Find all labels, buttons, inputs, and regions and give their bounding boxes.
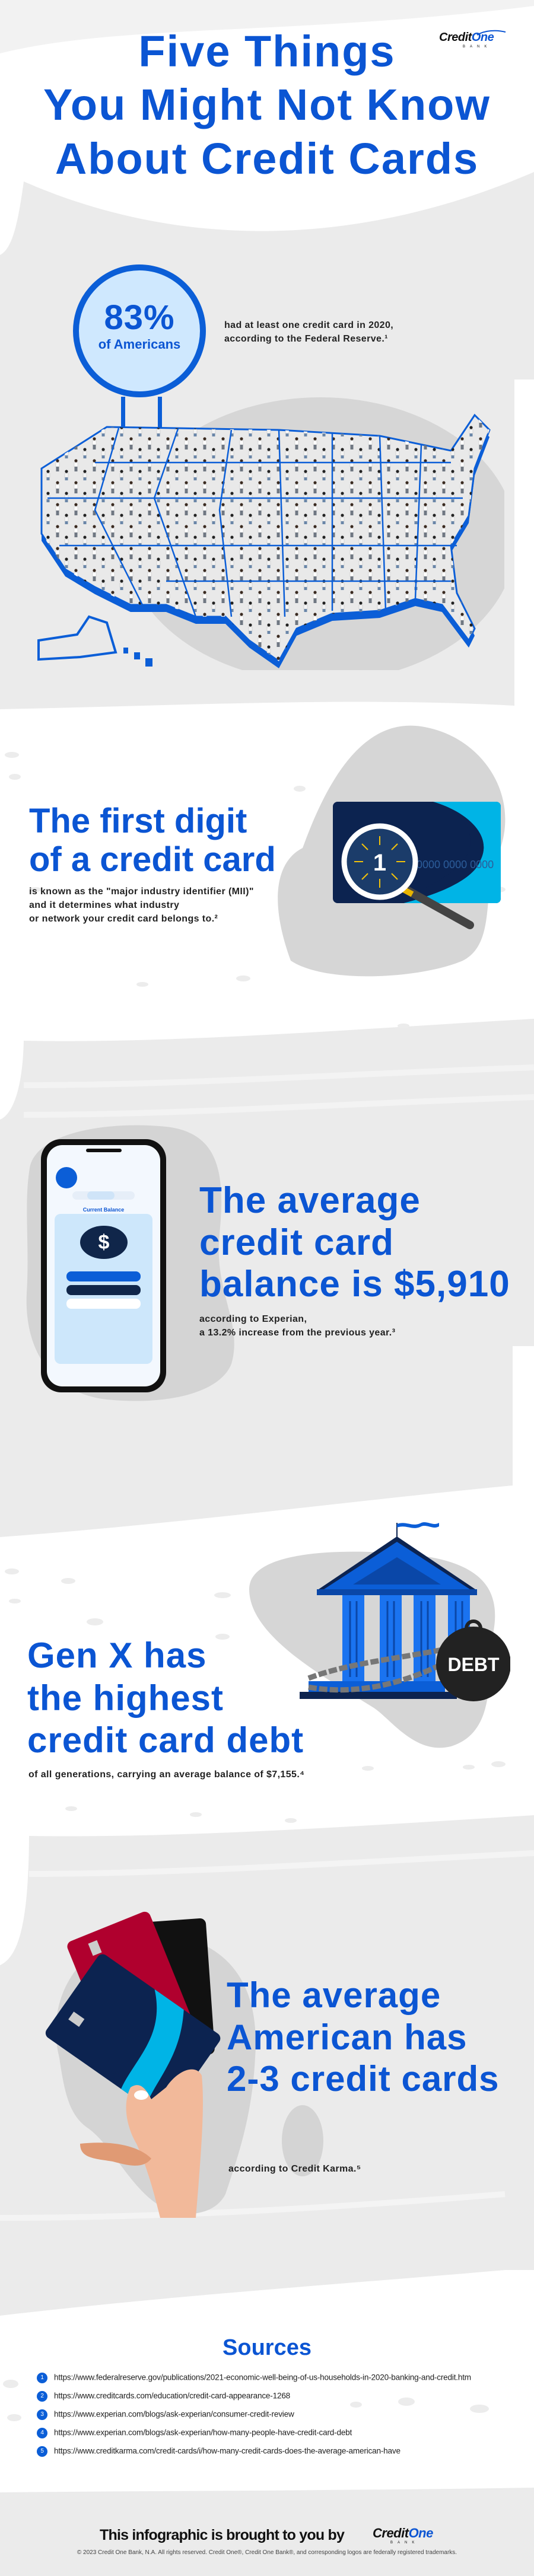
list: source urls: 3 (40, 2411, 44, 2418)
list: source urls: 5 (40, 2448, 44, 2454)
list: source urls: https://www.experian.com/blogs/ask-experian/consumer-credit-review (54, 2410, 294, 2419)
text: 83% description (224, 320, 393, 344)
icon: bank chained to debt ball (249, 1522, 510, 1748)
icon: smartphone: $ (98, 1231, 109, 1254)
icon: credit card with magnifier (278, 726, 506, 976)
panel: first digit: of a credit card (29, 840, 276, 879)
list: source urls: https://www.federalreserve.gov/publications/2021-economic-well-being-of-us-households-in-2020-banking-and-credit.htm (54, 2373, 471, 2382)
text: Experian balance source (199, 1314, 395, 1338)
panel: average balance: credit card (199, 1222, 394, 1263)
logo: footer Credit One: BANK (390, 2541, 419, 2545)
panel: average balance (26, 1126, 510, 1401)
footer: © 2023 Credit One Bank, N.A. All rights reserved. Credit One®, Credit One Bank®, and corresponding logos are federally registered trademarks. (77, 2549, 457, 2556)
callout posts (121, 397, 125, 428)
heading: average American cards: The average (227, 1975, 441, 2015)
heading: sources: Sources (223, 2335, 312, 2360)
heading: first digit: The first digit (29, 802, 247, 840)
logo: Credit One Bank: BANK (463, 45, 491, 49)
text: Experian balance source: a 13.2% increase from the previous year.³ (199, 1328, 395, 1338)
title: Five Things (138, 27, 396, 76)
callout circle: 83%: of Americans (98, 337, 180, 352)
text: 83% description: had at least one credit card in 2020, (224, 320, 393, 330)
panel: Gen X debt (27, 1522, 510, 1780)
shadow blob: right (282, 2105, 323, 2176)
callout circle: 83% (73, 264, 206, 397)
map of USA with people (37, 414, 491, 668)
panel: 83% of Americans (37, 264, 504, 670)
list: source urls: 2 (40, 2393, 44, 2399)
list: source urls: 4 (40, 2430, 44, 2436)
heading: Gen X: Gen X has (27, 1635, 206, 1675)
icon: smartphone: Current Balance (83, 1207, 124, 1213)
footer: This infographic is brought to you by (100, 2527, 344, 2543)
panel: average balance: balance is $5,910 (199, 1264, 510, 1305)
map shadow (152, 397, 504, 670)
text: Credit Karma: according to Credit Karma.⁵ (228, 2164, 361, 2174)
text: MII description: or network your credit card belongs to.² (29, 914, 218, 924)
logo: Credit One Bank (439, 30, 506, 49)
heading: average balance: The average (199, 1180, 421, 1221)
logo: footer Credit One: CreditOne (373, 2526, 433, 2540)
list: source urls: https://www.creditkarma.com/credit-cards/i/how-many-credit-cards-does-the-average-american-have (54, 2447, 401, 2456)
icon: smartphone (41, 1139, 166, 1392)
phone shadow blob (26, 1126, 234, 1401)
panel: sources (37, 2335, 471, 2457)
list: source urls: https://www.experian.com/blogs/ask-experian/how-many-people-have-credit-card-debt (54, 2428, 352, 2437)
footer (77, 2526, 457, 2556)
text: Experian balance source: according to Experian, (199, 1314, 307, 1324)
panel: number of cards (45, 1912, 500, 2218)
title (43, 27, 491, 183)
panel: first digit (29, 726, 506, 976)
text: MII description: is known as the "major industry identifier (MII)" (29, 887, 254, 897)
callout circle: 83%: 83% (104, 298, 175, 337)
title: About Credit Cards (55, 134, 479, 183)
icon: credit card with magnifier: 0000 0000 0000 (417, 859, 494, 871)
panel: number of cards: American has (227, 2017, 468, 2057)
icon: hand holding credit cards (45, 1912, 256, 2218)
panel: Gen X debt: the highest (27, 1678, 224, 1718)
icon: bank chained to debt ball: DEBT (447, 1654, 500, 1675)
list: source urls: https://www.creditcards.com/education/credit-card-appearance-1268 (54, 2392, 290, 2400)
text: Gen X balance: of all generations, carrying an average balance of $7,155.⁴ (28, 1770, 304, 1780)
title: You Might Not Know (43, 80, 491, 129)
text: MII description (29, 887, 254, 924)
list: source urls (37, 2373, 471, 2457)
logo: Credit One Bank: CreditOne (439, 31, 494, 44)
icon: credit card with magnifier: 1 (373, 850, 386, 876)
list: source urls: 1 (40, 2374, 44, 2381)
panel: number of cards: 2-3 credit cards (227, 2059, 500, 2099)
text: 83% description: according to the Federal Reserve.¹ (224, 334, 388, 344)
alaska and hawaii (39, 617, 116, 659)
panel: Gen X debt: credit card debt (27, 1720, 304, 1760)
text: MII description: and it determines what industry (29, 900, 179, 910)
